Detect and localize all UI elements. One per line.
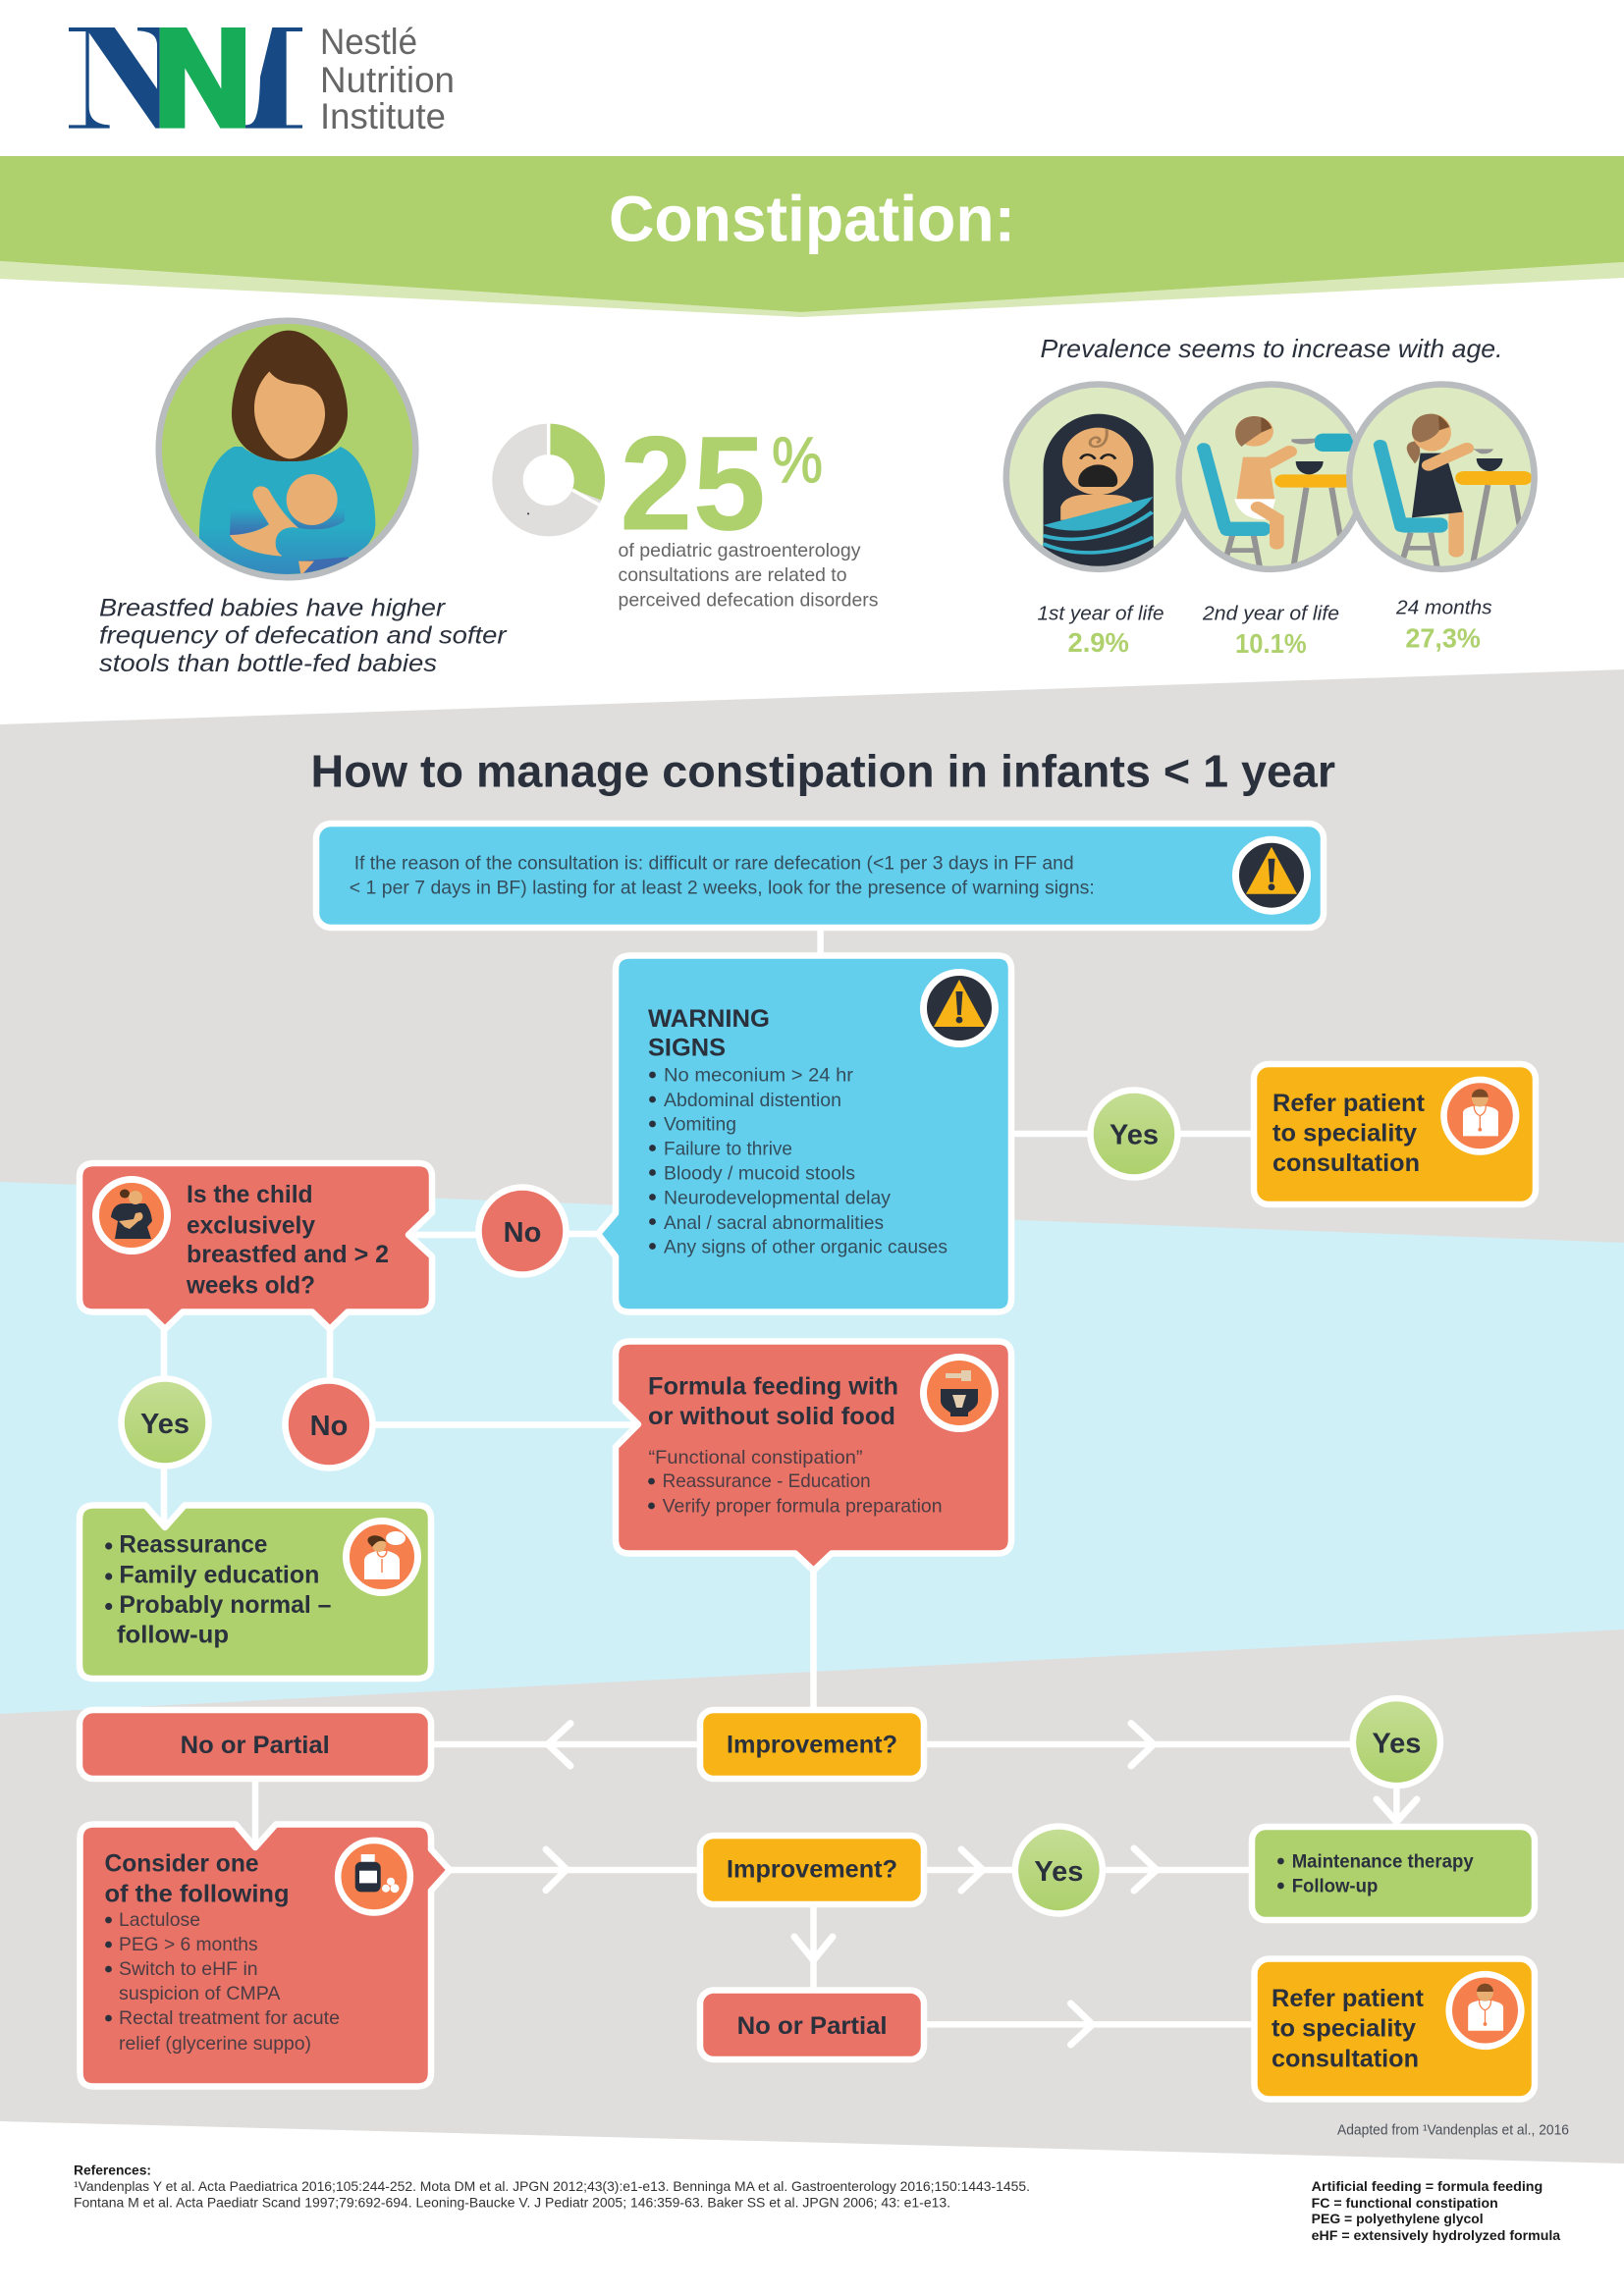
panel: refer patient top: consultation bbox=[1272, 1149, 1420, 1177]
panel: formula feeding: Verify proper formula preparation bbox=[663, 1496, 943, 1518]
panel: refer patient lower bbox=[1255, 1959, 1535, 2099]
references: ¹Vandenplas Y et al. Acta Paediatrica 2016;105:244-252. Mota DM et al. JPGN 2012;43(3):e1-e13. Benninga MA et al. Gastroenterology 2016;150:1443-1455. bbox=[74, 2178, 1030, 2194]
panel: reassurance bbox=[80, 1506, 431, 1679]
prevalence stat: 24 months: 24 months bbox=[1395, 598, 1492, 619]
panel: improvement first bbox=[700, 1710, 924, 1779]
logo: Nestlé Nutrition Institute: Nutrition bbox=[320, 60, 455, 100]
panel: exclusively breastfed question: exclusively bbox=[187, 1211, 315, 1239]
icon: doctor bbox=[1443, 1080, 1516, 1152]
panel: no or partial lower bbox=[700, 1991, 924, 2059]
panel: warning signs: Anal / sacral abnormalities bbox=[664, 1212, 884, 1234]
arrow: yes to maintenance bbox=[1134, 1848, 1157, 1891]
source note: Adapted from ¹Vandenplas et al., 2016 bbox=[1337, 2123, 1569, 2139]
panel: formula feeding: Formula feeding with bbox=[648, 1372, 898, 1400]
panel: no or partial top: No or Partial bbox=[181, 1732, 330, 1759]
node: no: No bbox=[504, 1217, 541, 1249]
references: References: bbox=[74, 2163, 151, 2177]
panel: exclusively breastfed question: breastfed and > 2 bbox=[187, 1241, 389, 1268]
panel: consultation reason bbox=[316, 824, 1324, 928]
panel: maintenance therapy bbox=[1252, 1827, 1535, 1920]
icon: doctor bbox=[1449, 1974, 1521, 2047]
panel: reassurance: Reassurance bbox=[119, 1531, 267, 1559]
prevalence stat: 24 months bbox=[1395, 598, 1492, 653]
text: breastfed babies bbox=[99, 595, 508, 677]
panel: maintenance therapy: Maintenance therapy bbox=[1292, 1851, 1474, 1873]
panel: refer patient lower: Refer patient bbox=[1272, 1985, 1425, 2012]
node: yes improvement second bbox=[1015, 1826, 1103, 1914]
logo: Nestlé Nutrition Institute: Institute bbox=[320, 96, 446, 136]
panel: formula feeding bbox=[616, 1341, 1011, 1571]
arrow: down to maintenance bbox=[1377, 1799, 1417, 1822]
node: yes to referral: Yes bbox=[1110, 1119, 1159, 1150]
panel: improvement first: Improvement? bbox=[727, 1732, 897, 1759]
panel: consider one of the following: Rectal treatment for acute bbox=[119, 2007, 340, 2029]
flow connectors bbox=[164, 929, 1396, 2024]
abbreviations legend: FC = functional constipation bbox=[1312, 2196, 1498, 2211]
prevalence stat: first year bbox=[1037, 604, 1164, 658]
panel: reassurance: Probably normal – bbox=[119, 1591, 331, 1619]
icon: 24 month child at table bbox=[1349, 385, 1535, 569]
logo: Nestlé Nutrition Institute bbox=[69, 22, 455, 136]
prevalence stat: second year: 2nd year of life bbox=[1202, 604, 1339, 625]
title banner: Constipation: bbox=[609, 183, 1015, 255]
panel: exclusively breastfed question: weeks old? bbox=[186, 1272, 315, 1300]
prevalence stat: second year bbox=[1202, 604, 1339, 659]
heading: how to manage: How to manage constipation in infants < 1 year bbox=[310, 746, 1335, 797]
panel: reassurance: Family education bbox=[119, 1561, 319, 1588]
panel: no or partial top bbox=[80, 1710, 431, 1779]
node: no breastfed bbox=[285, 1380, 373, 1468]
panel: warning signs: SIGNS bbox=[648, 1034, 726, 1061]
abbreviations legend: PEG = polyethylene glycol bbox=[1312, 2212, 1484, 2226]
icon: mother breastfeeding bbox=[159, 321, 415, 584]
panel: formula feeding: “Functional constipation” bbox=[648, 1447, 862, 1468]
prevalence stat: second year: 10.1% bbox=[1235, 628, 1307, 659]
panel: refer patient lower: to speciality bbox=[1272, 2015, 1416, 2043]
panel: consultation reason: If the reason of the consultation is: difficult or rare defecation (<1 per 3 days in FF and bbox=[354, 853, 1074, 875]
panel: maintenance therapy: Follow-up bbox=[1292, 1876, 1378, 1897]
icon: medicine bottle bbox=[338, 1841, 410, 1912]
icon: breastfeeding mother bbox=[96, 1180, 167, 1251]
donut chart: 25 percent bbox=[508, 423, 605, 521]
references: Fontana M et al. Acta Paediatr Scand 1997;79:692-694. Leoning-Baucke V. J Pediatr 2005; 146:359-63. Baker SS et al. JPGN 2006; 43: e1-e13. bbox=[74, 2195, 950, 2211]
light blue background band bbox=[0, 1182, 1624, 1714]
panel: no or partial lower: No or Partial bbox=[737, 2012, 888, 2040]
panel: warning signs: WARNING bbox=[648, 1005, 770, 1033]
arrow: to yes bbox=[1131, 1724, 1154, 1766]
prevalence stat: first year: 2.9% bbox=[1068, 627, 1129, 658]
panel: warning signs: Bloody / mucoid stools bbox=[664, 1163, 855, 1185]
panel: consider one of the following: suspicion of CMPA bbox=[119, 1983, 281, 2004]
panel: warning signs: Vomiting bbox=[664, 1114, 736, 1136]
panel: consider one of the following bbox=[81, 1824, 450, 2087]
abbreviations legend: eHF = extensively hydrolyzed formula bbox=[1312, 2228, 1561, 2243]
node: no bbox=[479, 1188, 566, 1274]
icon: warning triangle bbox=[923, 972, 996, 1044]
prevalence stat: 24 months: 27,3% bbox=[1405, 622, 1481, 653]
references bbox=[74, 2163, 1030, 2211]
node: yes improvement first: Yes bbox=[1372, 1728, 1421, 1759]
panel: warning signs: No meconium > 24 hr bbox=[664, 1064, 854, 1086]
arrow: improvement to yes bbox=[961, 1849, 983, 1891]
panel: exclusively breastfed question bbox=[80, 1163, 432, 1329]
panel: consider one of the following: Switch to eHF in bbox=[119, 1958, 258, 1980]
panel: consider one of the following: Lactulose bbox=[119, 1909, 200, 1931]
title banner bbox=[0, 156, 1624, 317]
node: no breastfed: No bbox=[310, 1411, 348, 1442]
abbreviations legend: Artificial feeding = formula feeding bbox=[1312, 2179, 1543, 2194]
panel: consultation reason: < 1 per 7 days in BF) lasting for at least 2 weeks, look for the presence of warning signs: bbox=[350, 878, 1095, 899]
text: breastfed babies: frequency of defecation and softer bbox=[99, 622, 508, 650]
node: yes improvement second: Yes bbox=[1034, 1856, 1083, 1888]
panel: consider one of the following: relief (glycerine suppo) bbox=[119, 2033, 311, 2055]
statistic: 25%: consultations are related to bbox=[619, 564, 847, 586]
statistic: 25%: perceived defecation disorders bbox=[619, 589, 879, 611]
panel: warning signs bbox=[598, 956, 1011, 1311]
panel: improvement second bbox=[700, 1836, 924, 1904]
abbreviations legend bbox=[1312, 2179, 1561, 2243]
text: breastfed babies: Breastfed babies have higher bbox=[99, 595, 447, 622]
panel: consider one of the following: PEG > 6 months bbox=[119, 1934, 258, 1955]
panel: warning signs: Abdominal distention bbox=[664, 1090, 841, 1111]
text: breastfed babies: stools than bottle-fed babies bbox=[99, 650, 437, 677]
panel: warning signs: Any signs of other organic causes bbox=[664, 1237, 947, 1258]
statistic: 25%: of pediatric gastroenterology bbox=[619, 540, 861, 561]
icon: doctor with speech bubble bbox=[346, 1522, 418, 1592]
panel: refer patient top bbox=[1254, 1064, 1536, 1204]
node: yes breastfed: Yes bbox=[140, 1409, 189, 1440]
panel: exclusively breastfed question: Is the child bbox=[187, 1181, 313, 1208]
text: prevalence heading: Prevalence seems to increase with age. bbox=[1041, 334, 1502, 363]
panel: consider one of the following: of the following bbox=[104, 1881, 289, 1908]
statistic: 25%: 25 bbox=[620, 408, 766, 560]
panel: refer patient top: to speciality bbox=[1272, 1119, 1417, 1147]
statistic: 25%: % bbox=[772, 423, 823, 496]
node: yes to referral bbox=[1090, 1090, 1178, 1178]
arrow: consider to improvement bbox=[546, 1849, 567, 1891]
icon: warning triangle bbox=[1235, 839, 1308, 911]
panel: reassurance: follow-up bbox=[117, 1622, 229, 1649]
panel: consider one of the following: Consider one bbox=[104, 1850, 259, 1878]
icon: toddler in high chair bbox=[1178, 385, 1364, 569]
panel: formula feeding: Reassurance - Education bbox=[663, 1470, 871, 1492]
panel: warning signs: Failure to thrive bbox=[664, 1138, 792, 1159]
arrow: to refer patient bbox=[1070, 2003, 1093, 2045]
arrow: to no or partial bbox=[548, 1724, 570, 1766]
icon: formula bowl bbox=[923, 1357, 996, 1429]
node: yes breastfed bbox=[122, 1378, 208, 1467]
logo: Nestlé Nutrition Institute: Nestlé bbox=[320, 22, 417, 62]
statistic: 25% bbox=[619, 408, 879, 611]
icon: crying infant bbox=[1006, 385, 1191, 572]
node: yes improvement first bbox=[1353, 1698, 1440, 1786]
panel: refer patient lower: consultation bbox=[1272, 2046, 1419, 2073]
prevalence stat: first year: 1st year of life bbox=[1037, 604, 1164, 625]
panel: warning signs: Neurodevelopmental delay bbox=[664, 1188, 891, 1209]
grey background band bbox=[0, 669, 1624, 2163]
panel: formula feeding: or without solid food bbox=[648, 1403, 895, 1430]
panel: improvement second: Improvement? bbox=[727, 1856, 897, 1884]
panel: refer patient top: Refer patient bbox=[1272, 1090, 1426, 1117]
arrow: improvement to no or partial bbox=[794, 1937, 833, 1960]
